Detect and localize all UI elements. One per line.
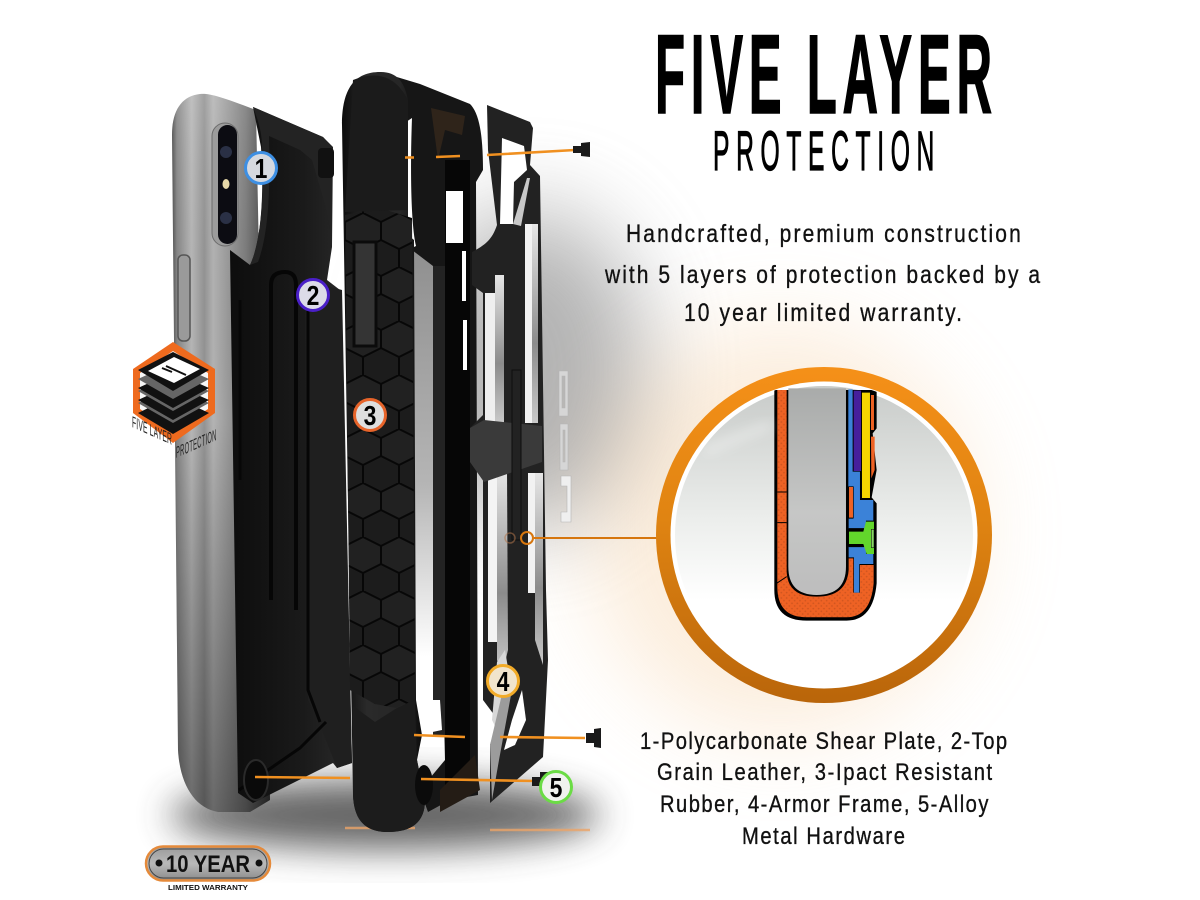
callout 4: 4 — [497, 667, 510, 698]
layer 2: top grain leather and layer 1: shear plate — [230, 107, 352, 803]
cross-section drawing — [774, 388, 877, 621]
badge caption: FIVE LAYER — [132, 413, 172, 449]
badge letter S — [148, 357, 200, 383]
description: Handcrafted, premium construction — [626, 219, 1021, 247]
layer list: Metal Hardware — [742, 822, 905, 849]
screws — [532, 142, 601, 790]
description: 10 year limited warranty. — [684, 298, 962, 326]
description: with 5 layers of protection backed by a — [604, 260, 1040, 288]
phone camera module — [212, 123, 238, 246]
callout 3 — [354, 400, 386, 432]
description — [604, 219, 1040, 326]
title: FIVE LAYER — [655, 13, 992, 138]
layer list: 1-Polycarbonate Shear Plate, 2-Top — [640, 727, 1007, 754]
callout 1: 1 — [255, 154, 267, 185]
badge caption: PROTECTION — [176, 426, 216, 462]
layer list: Grain Leather, 3-Ipact Resistant — [657, 758, 992, 785]
cross-section magnifier — [656, 367, 992, 703]
badge: 10 year limited warranty: LIMITED WARRANTY — [168, 883, 248, 892]
layer list: Rubber, 4-Armor Frame, 5-Alloy — [660, 790, 989, 817]
frame windows — [446, 191, 463, 243]
layer list — [640, 727, 1007, 849]
callout 4 — [488, 666, 518, 698]
phone: silver back — [172, 94, 270, 812]
callout 2: 2 — [307, 281, 319, 312]
reflection of the layers — [345, 828, 590, 830]
textured grip — [354, 242, 376, 346]
badge: 10 year limited warranty: 10 YEAR — [166, 851, 250, 878]
armor side windows — [485, 293, 495, 423]
plate screw post — [318, 148, 334, 178]
leader line to cross-section — [505, 532, 660, 544]
callout 1 — [246, 152, 276, 185]
badge: five layer protection — [132, 342, 216, 462]
orange leader lines — [255, 150, 585, 781]
armor crossbar — [470, 420, 542, 482]
UAG logo — [559, 371, 571, 522]
layer 3: impact resistant rubber — [342, 72, 433, 832]
callout 2 — [298, 280, 328, 312]
badge: 10 year limited warranty — [146, 846, 270, 892]
callout 5: 5 — [550, 773, 562, 804]
callout 3: 3 — [364, 401, 376, 432]
subtitle: PROTECTION — [713, 121, 934, 183]
rubber bumper cap — [353, 700, 425, 832]
bottom post — [244, 760, 268, 800]
armor upper window — [500, 138, 527, 224]
gap between rubber and frame — [405, 240, 443, 730]
badge caption — [132, 413, 216, 462]
layer 4: armor frame — [470, 105, 548, 803]
phone side button — [178, 255, 190, 341]
armor lower struts — [492, 650, 510, 730]
hex grip pattern — [345, 208, 415, 708]
layer 4: inner frame — [380, 72, 483, 812]
callout 5 — [540, 772, 572, 804]
